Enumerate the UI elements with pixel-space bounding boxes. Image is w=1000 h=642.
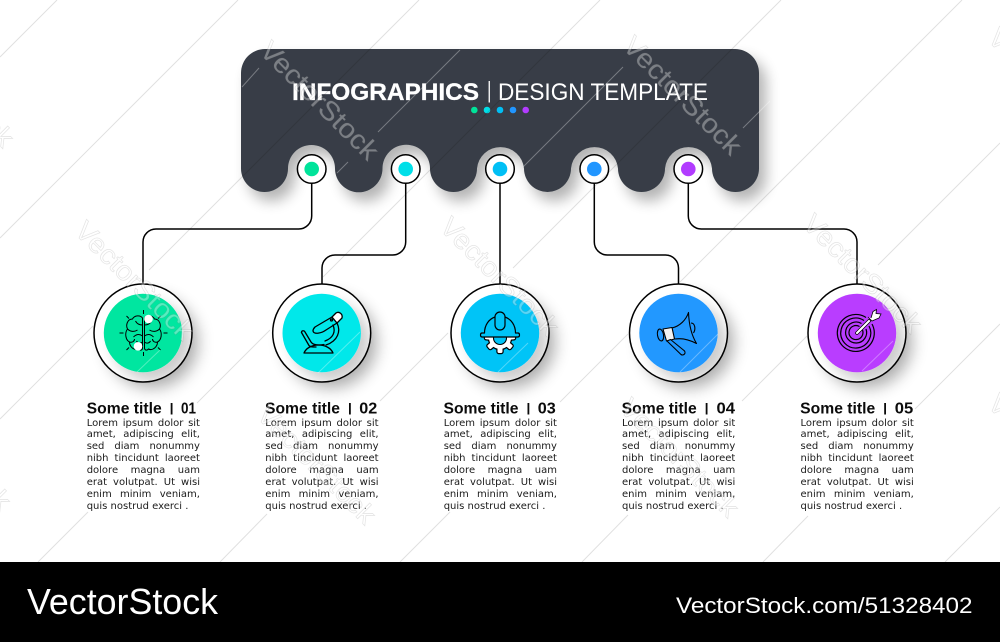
watermark: VectorStock bbox=[797, 208, 928, 339]
step circle 1 bbox=[94, 284, 192, 382]
body text 4: erat volutpat. Ut wisi bbox=[622, 477, 735, 488]
body text 1: sed diam nonummy bbox=[87, 441, 200, 452]
body text 2: nibh tincidunt laoreet bbox=[265, 453, 379, 464]
body text 4: sed diam nonummy bbox=[622, 441, 735, 452]
node 3 bbox=[486, 155, 514, 183]
header panel bbox=[241, 49, 759, 192]
body text 3: erat volutpat. Ut wisi bbox=[444, 477, 557, 488]
watermark: VectorStock bbox=[251, 399, 382, 530]
body text 1: dolore magna uam bbox=[87, 465, 200, 476]
body text 3: quis nostrud exerci . bbox=[444, 501, 545, 512]
heading: INFOGRAPHICS bbox=[292, 79, 479, 106]
body text 2: sed diam nonummy bbox=[265, 441, 379, 452]
title 1: Some title bbox=[87, 400, 162, 418]
connector 5 bbox=[688, 183, 857, 285]
body text 3: amet, adipiscing elit, bbox=[444, 429, 557, 440]
body text 5: dolore magna uam bbox=[800, 465, 914, 476]
watermark: VectorStock bbox=[69, 215, 200, 346]
connector 3 bbox=[499, 183, 501, 285]
body text 2: dolore magna uam bbox=[265, 465, 379, 476]
icon: helmet with gear bbox=[480, 312, 520, 353]
body text 3: dolore magna uam bbox=[444, 465, 557, 476]
body text 2: enim minim veniam, bbox=[265, 489, 379, 500]
heading bbox=[292, 79, 708, 106]
body text 2: erat volutpat. Ut wisi bbox=[265, 477, 379, 488]
title 2: Some title bbox=[265, 400, 340, 418]
body text 5: nibh tincidunt laoreet bbox=[800, 453, 914, 464]
connector 2 bbox=[322, 183, 406, 285]
body text 4: enim minim veniam, bbox=[622, 489, 735, 500]
body text 5: erat volutpat. Ut wisi bbox=[800, 477, 914, 488]
body text 4: dolore magna uam bbox=[622, 465, 735, 476]
body text 3 bbox=[444, 418, 557, 512]
node 4 bbox=[580, 155, 609, 183]
watermark: VectorStock bbox=[617, 30, 748, 161]
body text 5: sed diam nonummy bbox=[800, 441, 914, 452]
footer band: VectorStock bbox=[27, 581, 219, 622]
icon: brain bbox=[120, 310, 168, 356]
node 5 bbox=[674, 155, 703, 183]
title 3 bbox=[444, 400, 556, 418]
step circle 5 bbox=[808, 284, 906, 382]
body text 2: amet, adipiscing elit, bbox=[265, 429, 379, 440]
step circle 3 bbox=[451, 284, 549, 382]
footer band: VectorStock.com/51328402 bbox=[676, 593, 972, 618]
body text 4: amet, adipiscing elit, bbox=[622, 429, 735, 440]
connector 1 bbox=[143, 183, 312, 285]
body text 1: Lorem ipsum dolor sit bbox=[87, 418, 200, 428]
body text 1 bbox=[87, 418, 200, 512]
body text 2: quis nostrud exerci . bbox=[265, 501, 367, 512]
body text 5: enim minim veniam, bbox=[800, 489, 914, 500]
body text 3: sed diam nonummy bbox=[444, 441, 557, 452]
title 1: 01 bbox=[181, 400, 196, 418]
connector 4 bbox=[594, 183, 678, 285]
watermark: VectorStock bbox=[434, 211, 565, 342]
body text 5: quis nostrud exerci . bbox=[800, 501, 902, 512]
body text 5: Lorem ipsum dolor sit bbox=[800, 418, 914, 428]
node 2 bbox=[391, 155, 420, 183]
heading dots bbox=[471, 107, 529, 113]
heading: DESIGN TEMPLATE bbox=[498, 79, 708, 106]
body text 1: nibh tincidunt laoreet bbox=[87, 453, 200, 464]
body text 3: Lorem ipsum dolor sit bbox=[444, 418, 557, 428]
title 4 bbox=[622, 400, 735, 418]
body text 1: quis nostrud exerci . bbox=[87, 501, 188, 512]
body text 3: nibh tincidunt laoreet bbox=[444, 453, 557, 464]
title 5: 05 bbox=[895, 400, 914, 418]
icon: target bbox=[837, 310, 881, 351]
body text 5 bbox=[800, 418, 914, 512]
title 4: 04 bbox=[716, 400, 735, 418]
body text 5: amet, adipiscing elit, bbox=[800, 429, 914, 440]
title 1 bbox=[87, 400, 196, 418]
body text 1: enim minim veniam, bbox=[87, 489, 200, 500]
title 5: Some title bbox=[800, 400, 876, 418]
title 2 bbox=[265, 400, 377, 418]
step circle 2 bbox=[273, 284, 371, 382]
step circle 4 bbox=[630, 284, 728, 382]
title 4: Some title bbox=[622, 400, 697, 418]
node 1 bbox=[297, 155, 326, 183]
icon: megaphone bbox=[657, 312, 696, 355]
body text 1: erat volutpat. Ut wisi bbox=[87, 477, 200, 488]
watermark bbox=[0, 22, 1000, 530]
title 3: Some title bbox=[444, 400, 519, 418]
body text 4: Lorem ipsum dolor sit bbox=[622, 418, 735, 428]
title 2: 02 bbox=[359, 400, 377, 418]
body text 3: enim minim veniam, bbox=[444, 489, 557, 500]
body text 4: nibh tincidunt laoreet bbox=[622, 453, 735, 464]
body text 2 bbox=[265, 418, 379, 512]
watermark: VectorStock bbox=[254, 35, 385, 166]
body text 4: quis nostrud exerci . bbox=[622, 501, 724, 512]
title 5 bbox=[800, 400, 914, 418]
icon: microscope bbox=[302, 312, 342, 353]
body text 1: amet, adipiscing elit, bbox=[87, 429, 200, 440]
footer band bbox=[0, 562, 1000, 642]
title 3: 03 bbox=[538, 400, 556, 418]
body text 2: Lorem ipsum dolor sit bbox=[265, 418, 379, 428]
body text 4 bbox=[622, 418, 735, 512]
watermark: VectorStock bbox=[614, 392, 745, 523]
